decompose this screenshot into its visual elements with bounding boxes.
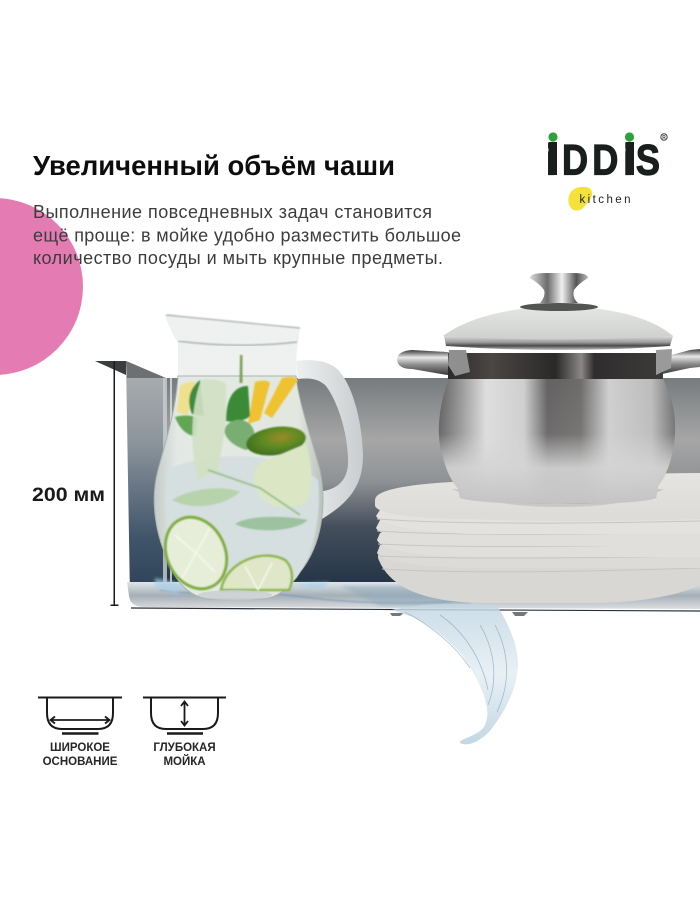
label: deep bowl: ГЛУБОКАЯ — [153, 742, 216, 754]
lemon slices — [248, 377, 298, 424]
description text — [33, 202, 461, 268]
pot lid — [443, 309, 673, 340]
pot — [397, 273, 700, 504]
sink floor — [127, 582, 700, 609]
pot body — [439, 376, 675, 504]
sink back wall — [163, 378, 700, 584]
logo: IDDIS kitchen: iDDiS — [546, 137, 660, 184]
drain feet — [390, 612, 528, 616]
jug neck and rim — [165, 314, 300, 380]
pale leaves — [254, 444, 311, 508]
logo: IDDIS kitchen: kitchen — [580, 194, 630, 206]
jug base — [198, 590, 272, 600]
description text: Выполнение повседневных задач становится — [33, 202, 432, 222]
label: deep bowl: МОЙКА — [163, 755, 206, 768]
icon: wide base — [38, 698, 122, 734]
sink left wall — [126, 361, 165, 596]
description text: количество посуды и мыть крупные предметы. — [33, 248, 443, 268]
pink circle — [0, 198, 83, 375]
dark lime — [244, 423, 308, 459]
title: Увеличенный объём чаши — [33, 150, 395, 181]
jug contents — [165, 355, 319, 578]
jug body — [154, 376, 323, 599]
label: wide base: ОСНОВАНИЕ — [43, 756, 118, 768]
label: wide base: ШИРОКОЕ — [50, 742, 110, 754]
jug — [154, 314, 363, 600]
leaves — [189, 380, 204, 416]
icon: deep bowl — [143, 698, 226, 734]
pot handle left — [397, 350, 470, 375]
pot handle right — [660, 349, 700, 374]
jug handle — [296, 360, 363, 519]
plates — [375, 473, 700, 603]
pot rivets — [448, 350, 470, 376]
pot rim — [444, 336, 673, 350]
label: wide base — [43, 742, 118, 768]
dimension line: 200 мм: 200 мм — [32, 485, 105, 506]
sink — [95, 361, 700, 616]
water splash — [392, 604, 518, 744]
description text: ещё проще: в мойке удобно разместить большое — [33, 226, 461, 246]
logo: IDDIS kitchen — [546, 132, 667, 211]
pot dark band — [448, 353, 663, 379]
sink top flange — [95, 361, 126, 375]
jug water highlight — [165, 456, 319, 578]
logo: IDDIS kitchen: R — [662, 135, 666, 141]
lime slices — [154, 507, 292, 599]
label: deep bowl — [153, 742, 216, 768]
